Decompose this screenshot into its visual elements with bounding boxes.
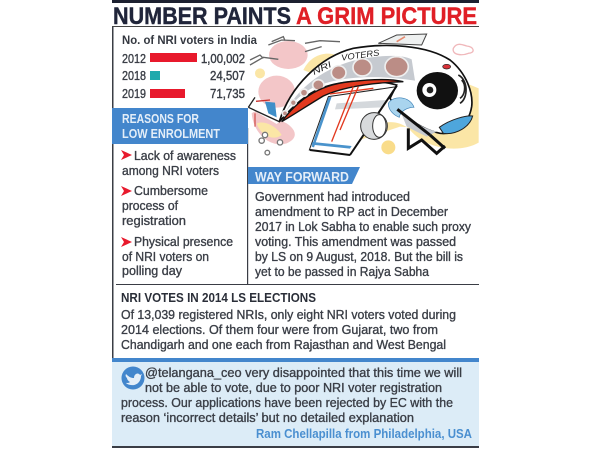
values: 1,00,002 — [201, 52, 245, 66]
illustration: airplane with NRI voters: VOTERS — [341, 47, 380, 63]
values: 71,735 — [210, 87, 245, 101]
tail fin — [248, 97, 282, 127]
panel: NRI voters bar chart — [122, 33, 257, 101]
reason 2: Cumbersome — [134, 183, 208, 198]
votes text: Of 13,039 registered NRIs, only eight NRI voters voted during — [121, 307, 456, 322]
red belly stripe — [282, 80, 403, 122]
nose blue accents — [388, 98, 414, 117]
votes text: Chandigarh and one each from Rajasthan and West Bengal — [121, 337, 446, 352]
reason 3: polling day — [122, 263, 182, 278]
panel: way forward — [248, 167, 471, 279]
illustration: airplane with NRI voters — [248, 34, 479, 155]
reason 1 — [121, 148, 236, 178]
title: NUMBER PAINTS — [113, 3, 291, 30]
wing — [309, 87, 397, 155]
window band — [285, 56, 415, 113]
reason 2: registration — [122, 213, 186, 228]
year labels — [122, 52, 146, 101]
tweet author: Ram Chellapilla from Philadelphia, USA — [256, 426, 473, 441]
way forward text — [255, 189, 471, 279]
panel: NRI votes in 2014 LS elections — [121, 290, 456, 352]
way forward text: amendment to RP act in December — [255, 204, 449, 219]
tweet text: @telangana_ceo very disappointed that this time we will — [145, 365, 462, 380]
reasons heading — [112, 108, 248, 144]
way forward text: 2017 in Lok Sabha to enable such proxy — [255, 219, 471, 234]
reasons heading: LOW ENROLMENT — [122, 127, 220, 141]
birds — [250, 37, 340, 65]
panel: reasons for low enrolment — [112, 108, 248, 278]
cockpit — [417, 72, 458, 109]
passenger windows — [282, 57, 408, 116]
way forward text: Government had introduced — [255, 189, 410, 204]
NRI VOTERS lettering: NRI — [311, 59, 334, 77]
way forward text: by LS on 9 August, 2018. But the bill is — [255, 249, 463, 264]
title — [113, 3, 477, 30]
tweet text — [121, 365, 462, 425]
votes heading: NRI VOTES IN 2014 LS ELECTIONS — [121, 290, 316, 305]
values — [201, 52, 245, 101]
reason 3: of NRI voters on — [122, 249, 209, 264]
panel: tweet — [112, 358, 479, 446]
reason list — [121, 148, 236, 278]
tweet text: not be able to vote, due to poor NRI voter registration — [145, 380, 442, 395]
reason 3 — [121, 234, 233, 278]
bars — [150, 53, 197, 98]
tweet text: process. Our applications have been rejected by EC with the — [121, 395, 453, 410]
title underline — [112, 26, 479, 27]
year labels: 2019 — [122, 87, 146, 101]
top rule — [112, 0, 479, 3]
title: A GRIM PICTURE — [296, 3, 477, 30]
chart heading: No. of NRI voters in India — [122, 33, 257, 47]
reason 2: process of — [122, 198, 178, 213]
tail smoke rings — [259, 132, 283, 155]
values: 24,507 — [210, 69, 245, 83]
reason 3: Physical presence — [134, 234, 233, 249]
votes text — [121, 307, 456, 352]
tweet text: reason ‘incorrect details’ but no detailed explanation — [121, 410, 414, 425]
reason 1: Lack of awareness — [134, 148, 236, 163]
way forward text: voting. This amendment was passed — [255, 234, 456, 249]
reasons heading: REASONS FOR — [122, 112, 199, 126]
engine — [361, 113, 387, 139]
reason 2 — [121, 183, 208, 228]
reason 1: among NRI voters — [122, 163, 219, 178]
votes text: 2014 elections. Of them four were from Gujarat, two from — [121, 322, 438, 337]
year labels: 2018 — [122, 69, 146, 83]
year labels: 2012 — [122, 52, 146, 66]
way forward text: yet to be passed in Rajya Sabha — [255, 264, 430, 279]
way forward heading: WAY FORWARD — [255, 170, 349, 184]
fuselage — [279, 46, 472, 134]
icon: twitter bird — [122, 366, 144, 390]
colour blobs — [252, 41, 479, 154]
landing gear — [397, 109, 445, 153]
frame borders — [112, 27, 479, 448]
